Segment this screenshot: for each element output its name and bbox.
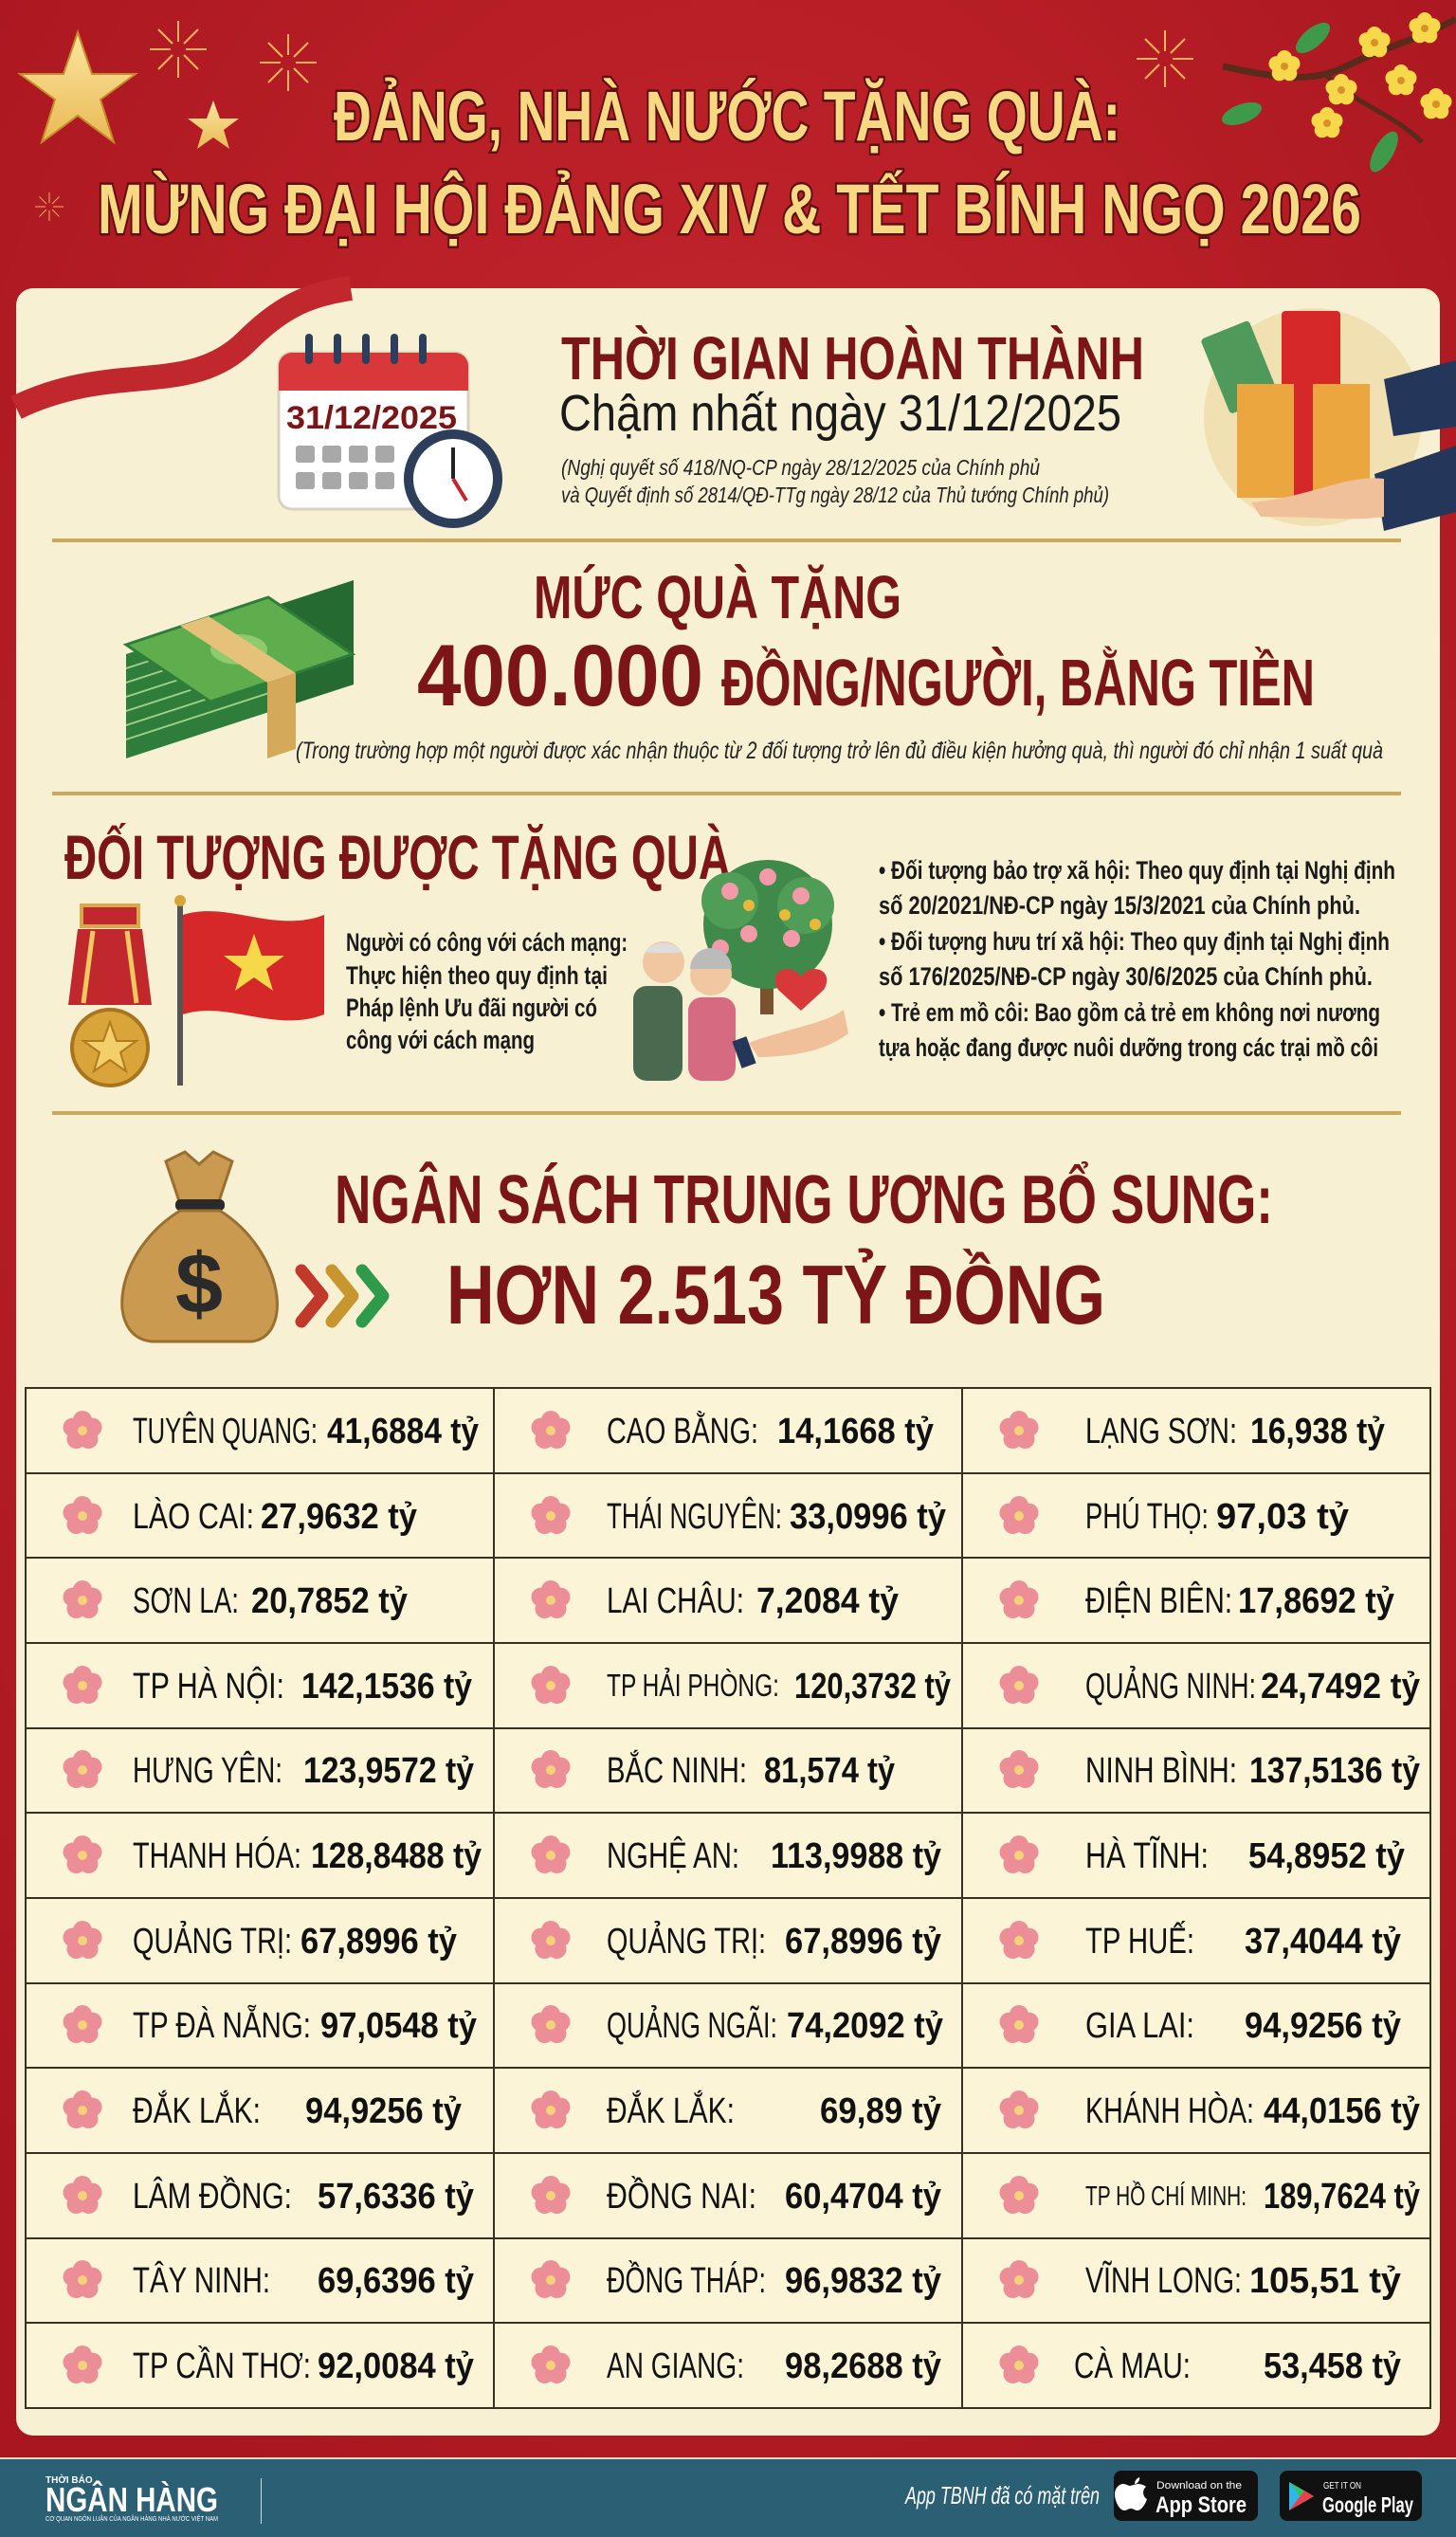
footer (0, 2457, 1456, 2537)
icon: small star (188, 100, 239, 149)
divider (52, 538, 1401, 542)
table values (251, 1412, 1420, 2386)
badge: google play: Google Play (1322, 2492, 1413, 2517)
text: merit people: Thực hiện theo quy định tại (346, 961, 608, 990)
table values: 41,6884 tỷ (327, 1412, 479, 1451)
icon: chevrons (301, 1270, 383, 1322)
table names: LAI CHÂU: (607, 1580, 744, 1621)
table values: 67,8996 tỷ (785, 1922, 941, 1962)
table values: 105,51 tỷ (1249, 2261, 1401, 2301)
heading: mức quà tặng: MỨC QUÀ TẶNG (534, 563, 901, 631)
icon: plum blossom branch (1219, 12, 1456, 176)
table values: 74,2092 tỷ (787, 2006, 943, 2046)
table names: QUẢNG NINH: (1085, 1665, 1256, 1707)
table names: QUẢNG NGÃI: (607, 2004, 777, 2046)
table values: 33,0996 tỷ (790, 1497, 946, 1537)
table names (133, 1410, 1256, 2386)
table values: 98,2688 tỷ (785, 2346, 941, 2386)
table names: HÀ TĨNH: (1085, 1835, 1209, 1876)
table names: TUYÊN QUANG: (133, 1411, 318, 1451)
table values: 94,9256 tỷ (1245, 2006, 1401, 2046)
amount (417, 628, 1315, 724)
badge: app store (1114, 2471, 1258, 2521)
table values: 54,8952 tỷ (1248, 1836, 1405, 1876)
icon: money bag: $ (175, 1237, 223, 1332)
logo: thời báo ngân hàng: THỜI BÁO (46, 2473, 93, 2486)
text: merit people (346, 928, 628, 1054)
icon: money stack (126, 580, 354, 758)
table names: QUẢNG TRỊ: (607, 1920, 766, 1962)
title: ĐẢNG, NHÀ NƯỚC TẶNG QUÀ: (334, 77, 1120, 155)
icon: money bag (122, 1152, 277, 1342)
table names: LÂM ĐỒNG: (133, 2175, 292, 2217)
table names: ĐIỆN BIÊN: (1085, 1580, 1232, 1621)
table names: KHÁNH HÒA: (1085, 2090, 1254, 2131)
table names: TP HỒ CHÍ MINH: (1085, 2180, 1247, 2212)
table values: 7,2084 tỷ (756, 1581, 899, 1621)
icon: big star (20, 32, 136, 142)
table values: 113,9988 tỷ (771, 1836, 941, 1876)
table names: CÀ MAU: (1074, 2345, 1191, 2386)
panel: completion time (279, 308, 1456, 531)
table names: ĐỒNG NAI: (607, 2175, 756, 2217)
table values: 44,0156 tỷ (1264, 2091, 1420, 2131)
icon: clock (404, 429, 502, 528)
table names: THÁI NGUYÊN: (607, 1496, 782, 1537)
table values: 37,4044 tỷ (1245, 1922, 1401, 1962)
table values: 97,0548 tỷ (320, 2006, 477, 2046)
table values: 123,9572 tỷ (303, 1751, 474, 1791)
table names: TÂY NINH: (133, 2260, 270, 2301)
table names: ĐẮK LẮK: (133, 2090, 261, 2131)
table values: 53,458 tỷ (1264, 2346, 1401, 2386)
table names: TP HÀ NỘI: (133, 1665, 284, 1707)
icon: fireworks (35, 21, 1193, 221)
table names: TP HUẾ: (1085, 1920, 1194, 1962)
table names: BẮC NINH: (607, 1749, 747, 1791)
legal note: (Nghị quyết số 418/NQ-CP ngày 28/12/2025 của Chính phủ (561, 455, 1040, 480)
table names: CAO BẰNG: (607, 1410, 758, 1451)
badge: app store: Download on the (1156, 2480, 1242, 2491)
text: bullet list (879, 856, 1395, 1062)
icon: calendar (279, 334, 468, 509)
logo: thời báo ngân hàng: CƠ QUAN NGÔN LUẬN CỦA NGÂN HÀNG NHÀ NƯỚC VIỆT NAM (46, 2514, 218, 2523)
table values: 14,1668 tỷ (777, 1412, 934, 1451)
icon: money tree with elderly (633, 860, 848, 1081)
table names: NINH BÌNH: (1085, 1750, 1237, 1791)
table names: HƯNG YÊN: (133, 1750, 282, 1791)
table values: 96,9832 tỷ (785, 2261, 941, 2301)
table values: 97,03 tỷ (1216, 1497, 1349, 1537)
table names: TP CẦN THƠ: (133, 2345, 311, 2386)
table names: AN GIANG: (607, 2346, 744, 2386)
icon: calendar: 31/12/2025 (286, 400, 457, 436)
table names: QUẢNG TRỊ: (133, 1920, 292, 1962)
table values: 17,8692 tỷ (1238, 1581, 1394, 1621)
heading: thời gian hoàn thành: THỜI GIAN HOÀN THÀNH (561, 324, 1144, 392)
table names: SƠN LA: (133, 1581, 239, 1621)
table values: 189,7624 tỷ (1264, 2177, 1420, 2217)
table names: PHÚ THỌ: (1085, 1496, 1209, 1537)
table values: 92,0084 tỷ (318, 2346, 474, 2386)
table values: 20,7852 tỷ (251, 1581, 408, 1621)
app availability text: App TBNH đã có mặt trên (904, 2481, 1100, 2510)
deadline text: Chậm nhất ngày 31/12/2025 (559, 385, 1121, 442)
badge: google play: GET IT ON (1323, 2481, 1361, 2491)
table values: 16,938 tỷ (1250, 1412, 1385, 1451)
panel: gift amount (126, 563, 1383, 764)
divider (52, 1111, 1401, 1115)
table values: 120,3732 tỷ (794, 1667, 951, 1707)
badge: google play (1280, 2471, 1422, 2521)
amount: 400.000 (417, 628, 703, 724)
decorative ribbon (16, 288, 351, 408)
logo: thời báo ngân hàng (46, 2473, 218, 2523)
text: merit people: Người có công với cách mạng: (346, 928, 628, 957)
text: merit people: công với cách mạng (346, 1026, 535, 1054)
icon: vietnam flag (174, 895, 324, 1086)
table values: 60,4704 tỷ (785, 2177, 941, 2217)
table names: LÀO CAI: (133, 1496, 254, 1537)
table names: THANH HÓA: (133, 1835, 301, 1876)
divider (52, 792, 1401, 795)
panel: budget (122, 1152, 1273, 1342)
badge: app store: App Store (1156, 2492, 1247, 2518)
logo: thời báo ngân hàng: NGÂN HÀNG (46, 2479, 218, 2519)
table: provincial budget (26, 1388, 1430, 2408)
table values: 94,9256 tỷ (305, 2091, 462, 2131)
table values: 81,574 tỷ (764, 1751, 895, 1791)
table values: 69,6396 tỷ (318, 2261, 474, 2301)
table values: 24,7492 tỷ (1261, 1667, 1420, 1707)
table values: 57,6336 tỷ (318, 2177, 474, 2217)
table names: TP ĐÀ NẴNG: (133, 2004, 311, 2046)
table names: NGHỆ AN: (607, 1835, 739, 1876)
table values: 27,9632 tỷ (261, 1497, 417, 1537)
icon: medal (68, 905, 152, 1086)
text: merit people: Pháp lệnh Ưu đãi người có (346, 994, 597, 1022)
table names: LẠNG SƠN: (1085, 1412, 1237, 1451)
table values: 69,89 tỷ (820, 2091, 941, 2131)
table values: 137,5136 tỷ (1249, 1751, 1420, 1791)
legal note: và Quyết định số 2814/QĐ-TTg ngày 28/12 của Thủ tướng Chính phủ) (561, 483, 1109, 507)
table names: GIA LAI: (1085, 2006, 1194, 2046)
table names: TP HẢI PHÒNG: (607, 1668, 779, 1703)
heading: đối tượng được tặng quà: ĐỐI TƯỢNG ĐƯỢC TẶNG QUÀ (64, 822, 731, 892)
title (98, 77, 1361, 248)
table values: 128,8488 tỷ (311, 1836, 482, 1876)
table names: ĐẮK LẮK: (607, 2090, 735, 2131)
panel: recipients (64, 822, 1395, 1086)
table names: ĐỒNG THÁP: (607, 2259, 766, 2301)
legal note (561, 455, 1109, 507)
table values: 142,1536 tỷ (301, 1667, 472, 1707)
budget amount: HƠN 2.513 TỶ ĐỒNG (446, 1248, 1105, 1342)
table values: 67,8996 tỷ (300, 1922, 457, 1962)
table names: VĨNH LONG: (1085, 2260, 1242, 2301)
icon: gift with hands (1200, 308, 1456, 531)
